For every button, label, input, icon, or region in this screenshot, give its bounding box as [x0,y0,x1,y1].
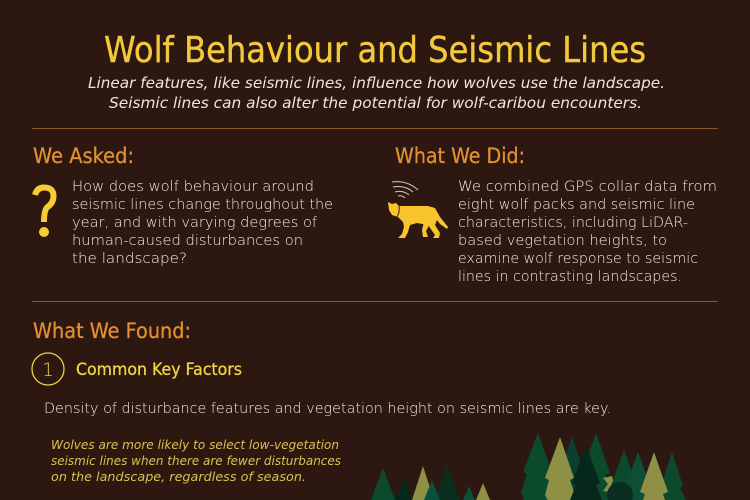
icon: collared wolf with signal [388,182,448,238]
heading: common key factors: Common Key Factors [76,360,242,380]
text: we asked body: How does wolf behaviour around [72,179,314,195]
text: we asked body: human-caused disturbances on [72,233,303,249]
heading: what we did: What We Did: [395,144,525,168]
text: italic finding: Wolves are more likely to select low-vegetation [51,437,339,452]
text: what we did body: lines in contrasting landscapes. [458,269,682,285]
subtitle: Seismic lines can also alter the potential for wolf-caribou encounters. [109,94,642,112]
text: italic finding [51,437,341,484]
subtitle [88,74,665,112]
text: italic finding: seismic lines when there are fewer disturbances [51,453,341,468]
text: what we did body: characteristics, including LiDAR- [458,215,688,231]
text: what we did body [458,179,717,285]
title: Wolf Behaviour and Seismic Lines [104,30,646,71]
heading: we asked: We Asked: [33,144,134,168]
text: we asked body: the landscape? [72,251,187,267]
illustration: forest [371,433,686,500]
icon: question mark [35,188,54,237]
text: we asked body: seismic lines change throughout the [72,197,333,213]
text: density statement: Density of disturbance features and vegetation height on seismic lines are key. [44,401,611,417]
text: italic finding: on the landscape, regardless of season. [51,469,306,484]
text: we asked body [72,179,333,267]
number badge 1 [32,353,64,385]
text: we asked body: year, and with varying degrees of [72,215,318,231]
number badge 1: 1 [42,359,54,381]
text: what we did body: examine wolf response to seismic [458,251,698,267]
text: what we did body: based vegetation heights, to [458,233,667,249]
heading: what we found: What We Found: [33,319,191,343]
text: what we did body: We combined GPS collar data from [458,179,717,195]
subtitle: Linear features, like seismic lines, influence how wolves use the landscape. [88,74,665,92]
text: what we did body: eight wolf packs and seismic line [458,197,695,213]
